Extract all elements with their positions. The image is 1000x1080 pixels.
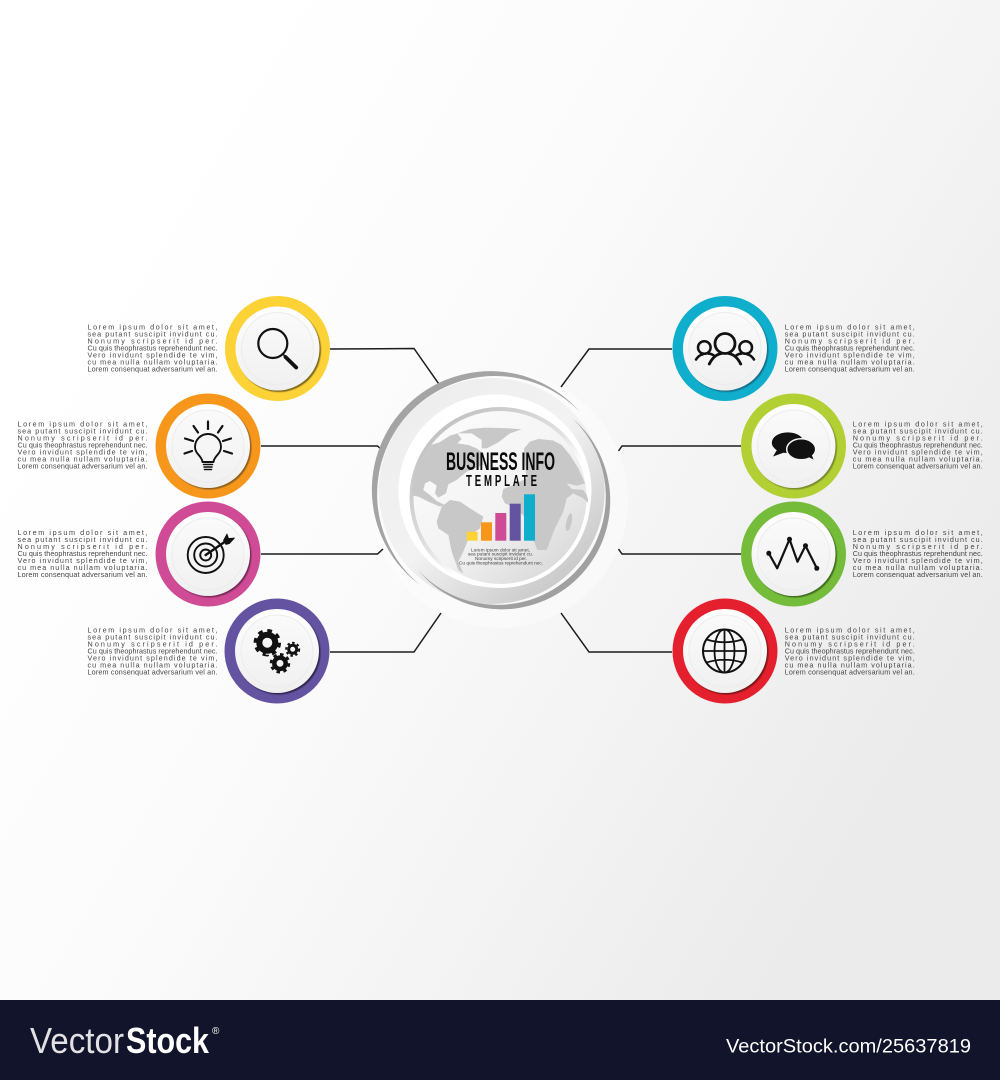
text: trend: Vero invidunt splendide te vim, [853,556,983,565]
hub crescent lower right [418,418,610,609]
text: globe: Nonumy scripserit id per. [785,640,915,648]
text: chat: Lorem consenquat adversarium vel an. [853,462,983,470]
text: team: Lorem ipsum dolor sit amet, [785,322,915,332]
text: idea: cu mea nulla nullam voluptaria. [18,454,148,464]
text: team: Cu quis theophrastus reprehendunt nec. [785,344,915,352]
hub caption: Nonumy scripserit id per. [475,556,527,562]
text: team: Vero invidunt splendide te vim, [785,350,915,360]
text: target [18,528,148,579]
text: idea: Nonumy scripserit id per. [18,434,148,442]
text: search: sea putant suscipit invidunt cu. [88,330,217,338]
icon: zigzag line [766,537,819,571]
node: search [225,296,330,401]
text: settings: sea putant suscipit invidunt cu. [88,632,217,642]
node: team [672,296,778,401]
text: settings: Vero invidunt splendide te vim, [88,654,218,662]
hub subtitle: TEMPLATE [466,472,537,490]
world map continents [407,428,590,573]
text: team: Nonumy scripserit id per. [785,336,915,346]
bar chart [467,494,535,541]
footer logo: Vector [30,1020,124,1061]
footer bar [0,1000,1000,1080]
hub halo [372,372,628,628]
hub crescent upper left [372,371,579,585]
text: target: Cu quis theophrastus reprehendunt nec. [18,549,148,558]
text: idea [18,420,148,470]
text: chat: Vero invidunt splendide te vim, [853,448,983,456]
text: settings: Cu quis theophrastus reprehendunt nec. [88,646,218,656]
text: settings: Nonumy scripserit id per. [88,640,218,648]
text: search: Nonumy scripserit id per. [88,336,218,346]
text: globe: Lorem consenquat adversarium vel an. [785,668,915,676]
text: globe [785,626,915,676]
footer logo: ® [212,1026,220,1037]
node: globe [672,598,778,704]
text: idea: Vero invidunt splendide te vim, [18,448,148,456]
footer url: VectorStock.com/25637819 [726,1036,971,1058]
footer logo: Stock [126,1020,210,1061]
node: idea [156,394,260,498]
hub caption [459,547,543,567]
text: team [785,322,915,374]
text: trend: cu mea nulla nullam voluptaria. [853,563,983,572]
text: globe: cu mea nulla nullam voluptaria. [785,660,915,670]
node: target [156,502,260,606]
text: trend: Cu quis theophrastus reprehendunt nec. [853,549,983,558]
text: search [88,322,218,374]
text: trend: Nonumy scripserit id per. [853,542,983,551]
text: globe: sea putant suscipit invidunt cu. [785,632,915,642]
hub caption: sea putant suscipit invidunt cu. [468,552,533,558]
text: target: sea putant suscipit invidunt cu. [18,535,147,544]
icon: globe [703,630,746,672]
hub title: BUSINESS INFO [446,448,555,476]
text: search: Vero invidunt splendide te vim, [88,350,218,360]
text: idea: Lorem ipsum dolor sit amet, [18,420,148,428]
footer logo [30,1020,220,1061]
text: target: Nonumy scripserit id per. [18,542,148,551]
text: settings: cu mea nulla nullam voluptaria. [88,660,218,670]
icon: target with arrow [188,534,234,573]
hub caption: Cu quis theophrastus reprehendunt nec. [459,561,543,567]
text: globe: Lorem ipsum dolor sit amet, [785,626,915,634]
text: team: Lorem consenquat adversarium vel an. [785,364,915,374]
text: chat: Nonumy scripserit id per. [853,434,983,442]
text: trend: sea putant suscipit invidunt cu. [853,535,983,544]
text: chat [853,420,983,470]
text: chat: cu mea nulla nullam voluptaria. [853,454,983,464]
icon: magnifier [258,329,296,368]
text: search: Cu quis theophrastus reprehendunt nec. [88,344,218,352]
text: search: Lorem consenquat adversarium vel an. [88,364,218,374]
text: target: Lorem ipsum dolor sit amet, [18,528,148,537]
text: globe: Vero invidunt splendide te vim, [785,654,915,662]
text: trend [853,528,983,579]
node: settings [224,598,330,704]
icon: speech bubbles [772,432,816,460]
central hub [372,371,610,609]
node: chat [741,394,846,498]
text: search: cu mea nulla nullam voluptaria. [88,358,218,366]
text: target: Vero invidunt splendide te vim, [18,556,148,565]
text: trend: Lorem consenquat adversarium vel an. [853,570,983,579]
icon: light bulb [184,422,232,470]
text: trend: Lorem ipsum dolor sit amet, [853,528,983,537]
text: chat: Cu quis theophrastus reprehendunt nec. [853,440,983,450]
text: settings: Lorem consenquat adversarium vel an. [88,668,218,676]
text: team: sea putant suscipit invidunt cu. [785,330,915,338]
node: trend [741,502,846,606]
text: settings: Lorem ipsum dolor sit amet, [88,626,218,634]
text: idea: Lorem consenquat adversarium vel an. [18,462,148,470]
text: chat: sea putant suscipit invidunt cu. [853,426,983,436]
text: settings [88,626,218,676]
text: idea: Cu quis theophrastus reprehendunt nec. [18,440,148,450]
icon: gears [255,631,299,672]
text: team: cu mea nulla nullam voluptaria. [785,358,915,366]
world map disc [412,409,588,586]
hub caption: Lorem ipsum dolor sit amet, [471,547,530,553]
text: idea: sea putant suscipit invidunt cu. [18,426,147,436]
text: globe: Cu quis theophrastus reprehendunt nec. [785,646,915,656]
text: target: cu mea nulla nullam voluptaria. [18,563,148,572]
icon: people [696,334,754,364]
hub disc [379,378,605,604]
connector lines [261,348,741,652]
hub white band [398,394,592,588]
text: chat: Lorem ipsum dolor sit amet, [853,420,983,428]
text: search: Lorem ipsum dolor sit amet, [88,322,218,332]
text: target: Lorem consenquat adversarium vel an. [18,570,148,579]
